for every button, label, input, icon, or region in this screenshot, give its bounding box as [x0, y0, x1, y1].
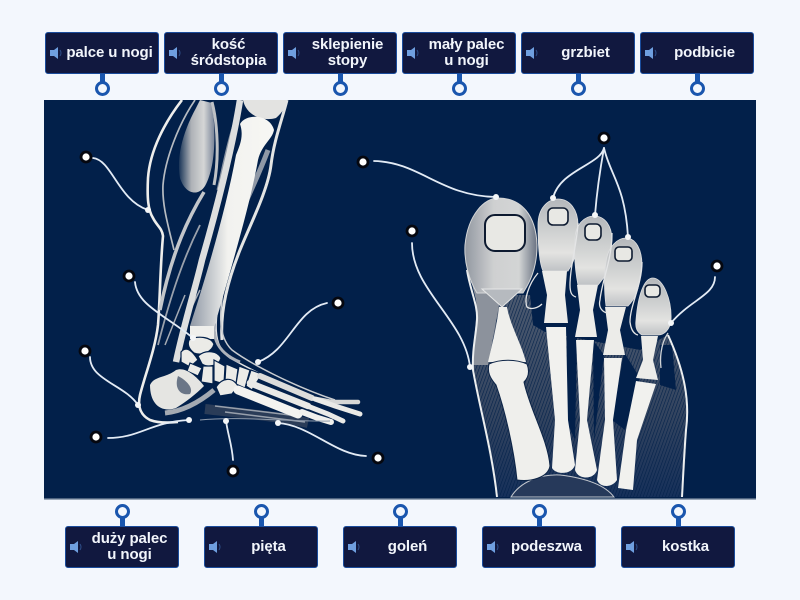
- label: palce u nogi: palce u nogi: [66, 44, 153, 61]
- label: podbicie: podbicie: [674, 44, 735, 61]
- label: sklepienie stopy: [283, 32, 397, 96]
- label: palce u nogi: [45, 32, 159, 96]
- fibula: [176, 100, 240, 362]
- tibia: [190, 117, 274, 328]
- front view of the foot: [465, 198, 687, 497]
- big toe: [465, 198, 537, 307]
- ball of foot arc: [511, 475, 614, 497]
- label: pięta: pięta: [251, 538, 286, 555]
- label: podeszwa: [482, 504, 596, 568]
- label: kość śródstopia: kość: [212, 36, 245, 53]
- hotspot markers: [80, 133, 722, 476]
- sole bone strut and muscles: [165, 390, 214, 413]
- third toe: [575, 216, 612, 478]
- label: mały palec u nogi: [402, 32, 516, 96]
- label: goleń: [343, 504, 457, 568]
- sole of the foot: [472, 295, 687, 497]
- label: kostka: [621, 504, 735, 568]
- ankle and midfoot bones: [181, 326, 262, 396]
- label: sklepienie stopy: sklepienie: [312, 36, 383, 53]
- label: duży palec u nogi: u nogi: [107, 546, 152, 563]
- label: kostka: kostka: [662, 538, 709, 555]
- big toe bones: [488, 307, 526, 362]
- label: grzbiet: grzbiet: [561, 44, 610, 61]
- label: mały palec u nogi: mały palec: [429, 36, 504, 53]
- label: kość śródstopia: śródstopia: [191, 52, 266, 69]
- label: goleń: goleń: [388, 538, 427, 555]
- label: podeszwa: podeszwa: [511, 538, 582, 555]
- outline of the foot: [467, 270, 687, 497]
- dark gaps between metatarsals: [566, 330, 676, 440]
- skin beside the big toe bones: [468, 268, 500, 365]
- line anchor points: [135, 194, 674, 426]
- fourth toe: [597, 238, 642, 486]
- leader lines: [90, 148, 715, 460]
- label: podbicie: [640, 32, 754, 96]
- label: kość śródstopia: [164, 32, 278, 96]
- label: duży palec u nogi: duży palec: [92, 530, 167, 547]
- second toe: [538, 199, 578, 473]
- femur end: [243, 100, 287, 119]
- anatomical illustration panel: [44, 100, 756, 500]
- metatarsals and phalanges: [238, 376, 360, 422]
- tendons between toes: [526, 223, 642, 335]
- side view of the leg and foot: [139, 100, 360, 423]
- label: duży palec u nogi: [65, 504, 179, 568]
- little toe: [618, 278, 671, 490]
- label: mały palec u nogi: u nogi: [444, 52, 489, 69]
- label: sklepienie stopy: stopy: [328, 52, 367, 69]
- label: pięta: [204, 504, 318, 568]
- calf muscle and tendons: [139, 100, 335, 423]
- label: grzbiet: [521, 32, 635, 96]
- calcaneus: [150, 369, 204, 409]
